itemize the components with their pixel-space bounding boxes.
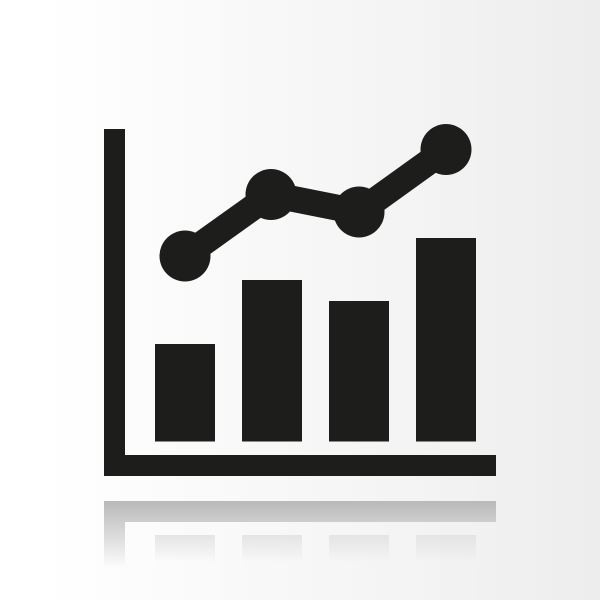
line chart with markers (160, 124, 472, 282)
reflection (104, 501, 496, 568)
axes (104, 129, 496, 476)
bar chart (155, 238, 476, 442)
